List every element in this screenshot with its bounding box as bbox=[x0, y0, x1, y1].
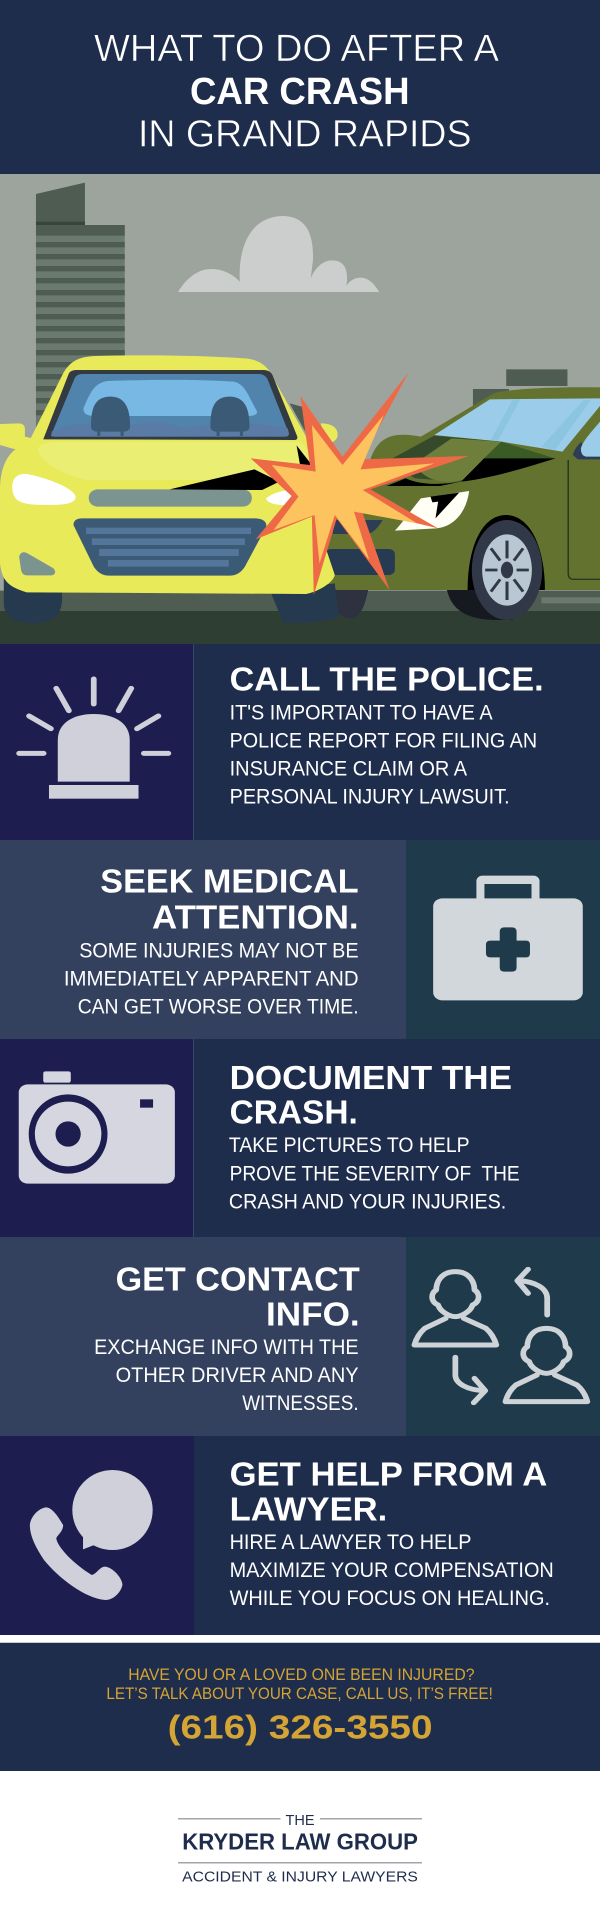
heading: SEEK MEDICAL bbox=[100, 863, 359, 900]
heading: DOCUMENT THE bbox=[230, 1059, 512, 1096]
icon: tall building bbox=[36, 183, 125, 432]
logo: Kryder Law Group bbox=[178, 1812, 422, 1885]
yellow car bbox=[0, 355, 339, 623]
icon: camera bbox=[19, 1071, 175, 1184]
heading: CALL THE POLICE. bbox=[230, 661, 544, 698]
panel: get help from a lawyer bbox=[0, 1436, 600, 1635]
text block: OTHER DRIVER AND ANY bbox=[116, 1363, 359, 1387]
icon: two people exchanging info bbox=[414, 1269, 587, 1403]
heading: GET CONTACT bbox=[116, 1260, 360, 1297]
text block bbox=[229, 1133, 520, 1213]
text block: HIRE A LAWYER TO HELP bbox=[230, 1530, 472, 1554]
icon: olive car wheel bbox=[472, 520, 542, 620]
text block: IMMEDIATELY APPARENT AND bbox=[64, 966, 359, 990]
text block bbox=[230, 700, 537, 808]
panel: seek medical attention bbox=[0, 840, 600, 1039]
text block: PERSONAL INJURY LAWSUIT. bbox=[230, 784, 510, 808]
text block: MAXIMIZE YOUR COMPENSATION bbox=[230, 1558, 554, 1582]
text block bbox=[64, 938, 359, 1018]
text block: TAKE PICTURES TO HELP bbox=[229, 1133, 470, 1157]
hero illustration: car crash scene bbox=[0, 174, 600, 644]
phone number: (616) 326-3550 bbox=[168, 1708, 432, 1745]
icon: impact starburst bbox=[251, 372, 469, 595]
heading: INFO. bbox=[266, 1295, 360, 1332]
call to action banner bbox=[0, 1642, 600, 1771]
text block: IT'S IMPORTANT TO HAVE A bbox=[230, 700, 493, 724]
text block bbox=[230, 1530, 554, 1610]
text block: EXCHANGE INFO WITH THE bbox=[94, 1335, 359, 1359]
icon: cloud bbox=[178, 216, 379, 292]
heading: CRASH. bbox=[230, 1093, 358, 1130]
heading bbox=[100, 863, 359, 935]
panel: call the police bbox=[0, 644, 600, 840]
panel: get contact info bbox=[0, 1237, 600, 1436]
text block: WITNESSES. bbox=[242, 1391, 359, 1415]
icon: phone and speech bubble bbox=[30, 1470, 153, 1600]
icon: distant buildings bbox=[473, 369, 567, 406]
text block: SOME INJURIES MAY NOT BE bbox=[79, 938, 359, 962]
heading bbox=[230, 1059, 512, 1130]
olive car bbox=[325, 387, 600, 620]
text block: POLICE REPORT FOR FILING AN bbox=[230, 728, 537, 752]
title header: IN GRAND RAPIDS bbox=[138, 114, 472, 156]
text block: PROVE THE SEVERITY OF THE bbox=[230, 1161, 520, 1185]
heading bbox=[230, 1456, 547, 1528]
text block: CRASH AND YOUR INJURIES. bbox=[229, 1189, 506, 1213]
text block: WHILE YOU FOCUS ON HEALING. bbox=[230, 1586, 550, 1610]
heading bbox=[116, 1260, 360, 1332]
text block: CAN GET WORSE OVER TIME. bbox=[78, 994, 359, 1018]
logo: Kryder Law Group: THE bbox=[286, 1812, 315, 1829]
call to action banner: HAVE YOU OR A LOVED ONE BEEN INJURED? bbox=[128, 1666, 474, 1684]
call to action banner: LET’S TALK ABOUT YOUR CASE, CALL US, IT’S FREE! bbox=[106, 1685, 493, 1703]
title header bbox=[0, 0, 600, 174]
icon: yellow car windshield bbox=[43, 370, 297, 440]
text block: INSURANCE CLAIM OR A bbox=[230, 756, 468, 780]
panel: document the crash bbox=[0, 1039, 600, 1237]
title header: CAR CRASH bbox=[190, 71, 410, 113]
icon: siren bbox=[19, 679, 168, 799]
road and ground bbox=[0, 591, 600, 644]
text block bbox=[94, 1335, 359, 1415]
icon: medical kit bbox=[433, 876, 583, 1000]
logo: Kryder Law Group: KRYDER LAW GROUP bbox=[182, 1828, 418, 1854]
title header: WHAT TO DO AFTER A bbox=[94, 28, 500, 70]
heading: GET HELP FROM A bbox=[230, 1456, 547, 1493]
heading: ATTENTION. bbox=[152, 898, 359, 935]
logo: Kryder Law Group: ACCIDENT & INJURY LAWYERS bbox=[182, 1868, 418, 1885]
heading: LAWYER. bbox=[230, 1491, 387, 1528]
